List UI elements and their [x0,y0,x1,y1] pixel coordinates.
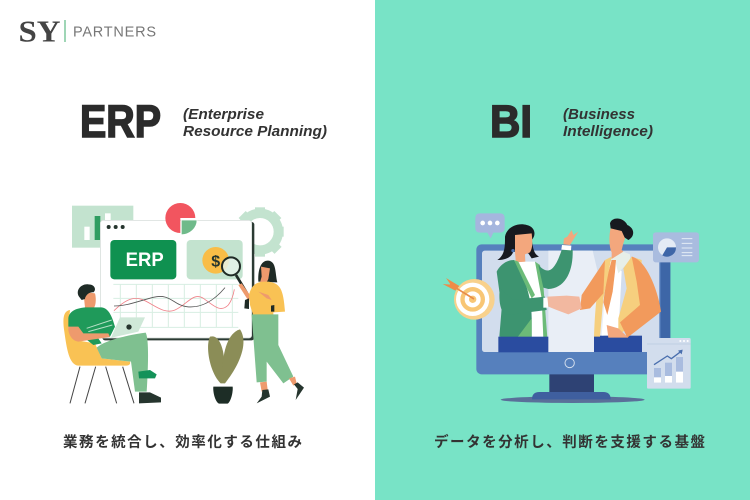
dashboard window [100,220,254,340]
illustration: seated man with laptop [63,284,161,403]
badge: ERP: ERP [126,250,164,271]
heading: Business Intelligence: Intelligence) [563,124,653,140]
panel: BI background [375,0,750,500]
logo: SY Partners [18,14,156,48]
illustration: handshake [547,296,582,314]
icon: target with arrow [443,278,495,320]
logo: SY Partners: SY [18,14,61,48]
monitor [476,244,670,403]
caption: ERP: 業務を統合し、効率化する仕組み [63,433,302,451]
card: dollar coin [187,240,243,279]
heading: Business Intelligence: (Business [563,107,635,123]
icon: pie chart card [653,232,699,262]
heading: ERP: ERP [80,96,161,147]
illustration: BI handshake on monitor [443,213,699,403]
heading: Enterprise Resource Planning: Resource Planning) [183,124,327,140]
card: dollar coin: $ [211,253,220,270]
illustration: woman in green [497,224,578,352]
icon: gear [239,207,284,257]
badge: ERP [110,240,176,279]
illustration: man in orange vest [580,219,661,352]
logo: SY Partners: PARTNERS [73,24,156,40]
icon: growth chart card [647,338,691,389]
heading: Business Intelligence [563,107,653,140]
icon: bar chart card [72,206,133,248]
heading: Enterprise Resource Planning [183,107,327,140]
icon: speech bubble [475,213,505,238]
icon: magnifying glass [222,257,247,293]
heading: Enterprise Resource Planning: (Enterprise [183,107,264,123]
caption: BI: データを分析し、判断を支援する基盤 [434,433,706,451]
icon: potted plant [208,329,243,404]
icon: pie chart [165,203,197,235]
heading: BI: BI [490,96,532,147]
illustration: ERP team with dashboard [63,203,304,404]
illustration: standing woman [238,261,304,403]
line chart [113,284,238,327]
